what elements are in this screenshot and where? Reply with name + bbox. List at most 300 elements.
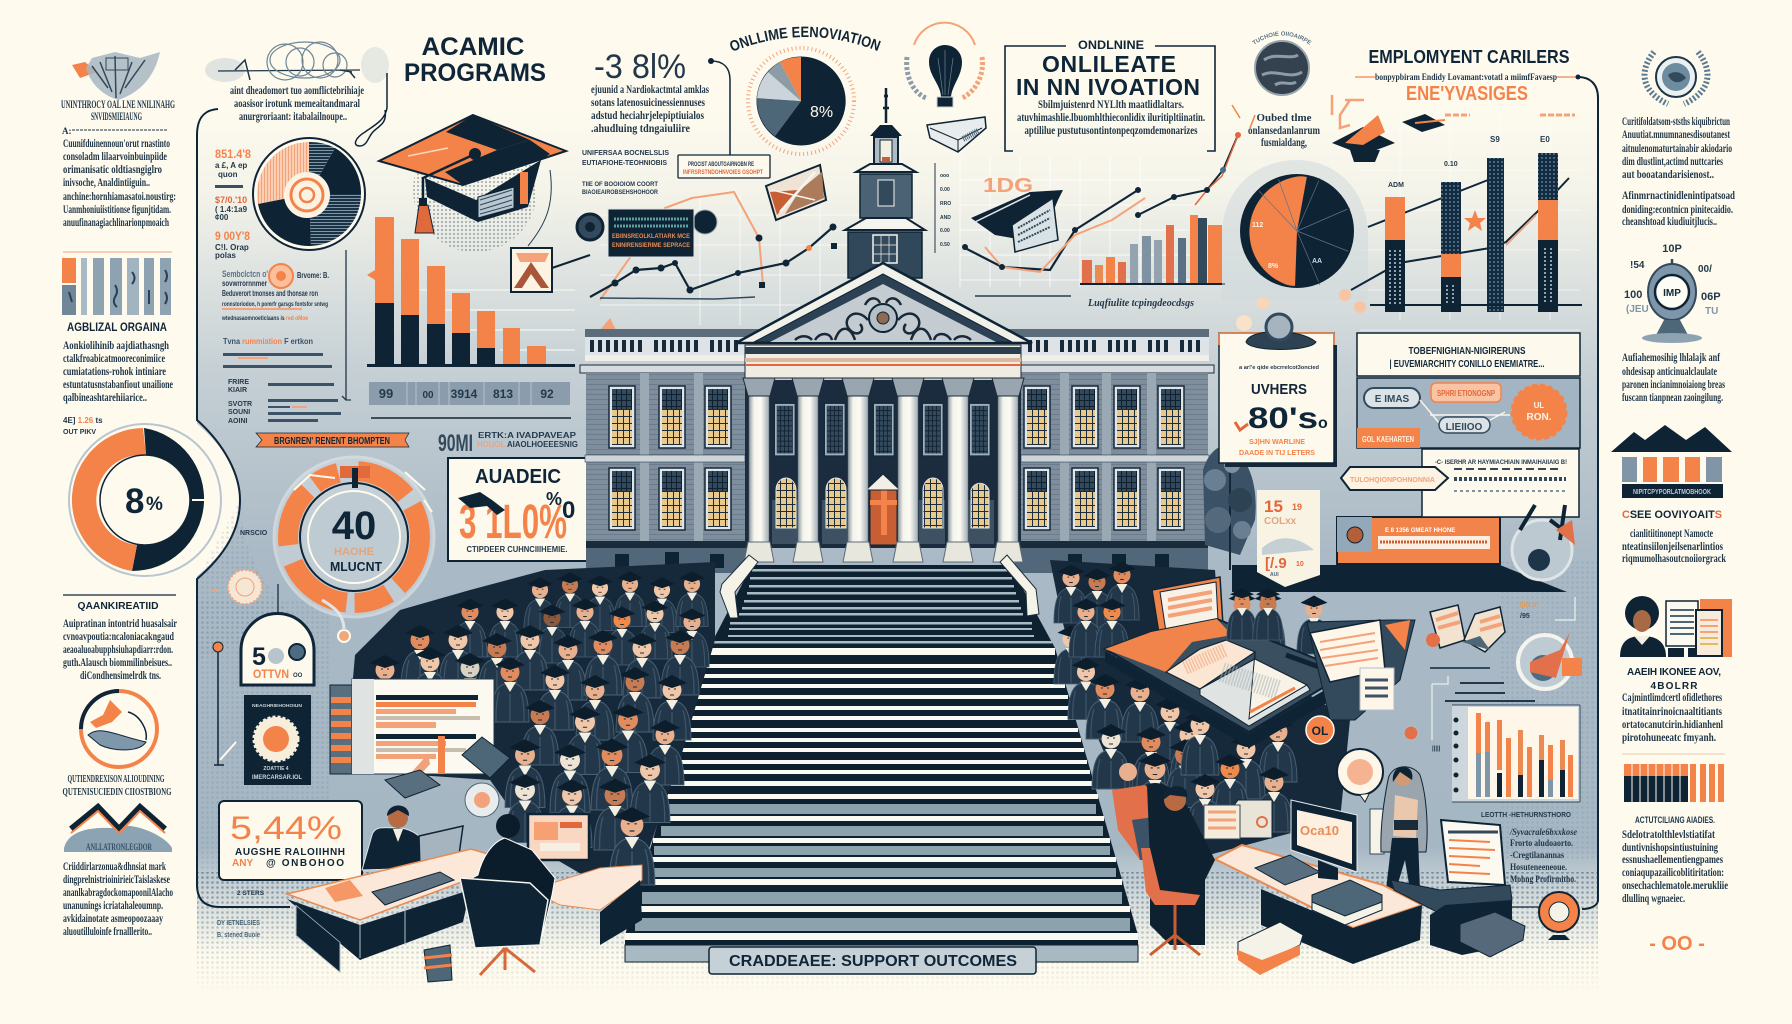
tower/cupola [845, 88, 925, 278]
pie chart with centre target [253, 138, 365, 250]
icon: mountains and bars [1611, 425, 1732, 498]
text block [63, 338, 173, 436]
desk and office workers right: Oca10 [1300, 823, 1339, 838]
bar chart: employment: ADM [1388, 182, 1404, 189]
icon: circle illustration [81, 691, 157, 767]
pie chart: 8% [748, 48, 854, 154]
heading: csee oovioaits: CSEE OOVIYOAITS [1622, 509, 1722, 521]
panel frame line [197, 109, 290, 907]
left stat list: polas [215, 251, 236, 260]
navy poster with sun: IMERCARSAR.IOL [252, 775, 302, 781]
pie chart: right: AA [1312, 258, 1322, 265]
intro text block [230, 83, 364, 123]
card: 5,44%: ANY [232, 858, 253, 869]
text block: Auipratinan intontrid huasalsair [63, 616, 177, 630]
clipboard card: o [1318, 415, 1328, 432]
left stat list: C!l. Orap [215, 243, 249, 252]
small dense text over chart [1430, 667, 1535, 752]
mini text block above chart [582, 150, 669, 196]
stat: 90mi: 90MI [438, 430, 473, 457]
top centre stat: -3 8l% [594, 48, 686, 86]
text block: aluoutilluloinfe frnalllerito.. [63, 924, 152, 938]
small text blocks: Beduverort tmonses and thonsae ron [222, 289, 318, 298]
card: academic percentage: AUADEIC [475, 466, 561, 488]
card: academic percentage: 3 1L0% [459, 496, 567, 549]
top centre stat: sotans latenosuicinessiennuses [591, 95, 705, 109]
text block: pirotohuneeatc fmyanh. [1622, 730, 1716, 744]
document with orange folder [1306, 620, 1418, 744]
text block: Sdelotratolthlevlstiatifat [1622, 827, 1715, 841]
text block: Anuutiat.mnumnanesdisoutanest [1622, 127, 1730, 141]
left stat list: ( 1.4:1a9 [215, 205, 248, 214]
card: 5,44%: 2 STERS [237, 890, 265, 897]
table with open book [1105, 619, 1349, 748]
caption near chart: Mohng Profirmitho. [1510, 874, 1576, 884]
clipboard card: 80's [1248, 402, 1318, 435]
text block: diCondhensimelrdk tns. [80, 668, 161, 682]
gauge dial: 00/ [1698, 264, 1712, 275]
arch card: 500: 5 [252, 643, 266, 671]
heading: qaankireatiid [63, 595, 176, 612]
box group: badges: UL [1534, 401, 1544, 410]
gauge ring with 40: 40 [332, 504, 376, 548]
grand staircase [625, 555, 1138, 962]
left stat list: a £, A ep [215, 161, 247, 170]
donut chart 8%: % [146, 494, 163, 515]
line chart left [590, 192, 860, 330]
heading: left column: UNINTHROCY OAL LNE NNILINAHG [61, 97, 175, 111]
text block: anuufinanagiachlinarionpmoaich [63, 215, 169, 229]
text block: doniding:econtnicn pinitecaidio. [1622, 202, 1733, 216]
small callout card: INFRSRSTNDOHNVOIES GSOHPT [683, 170, 763, 176]
right top chart: 0.50 [940, 242, 950, 248]
left stat list [215, 147, 251, 260]
text block: orimanisatic oldtiasngiglro [63, 162, 162, 176]
navy poster with sun: ZOATTIE 4 [263, 766, 289, 772]
small dense text over chart: ||||| [1432, 746, 1441, 752]
text block [63, 859, 173, 938]
text block: cheanshtoad kiudiuitjlucis.. [1622, 214, 1717, 228]
donut chart 8%: 8 [125, 482, 144, 521]
icon: mini caps [1332, 114, 1575, 162]
heading: agbilzal: AGBLIZAL ORGAINA [67, 320, 167, 334]
gauge dial [1624, 243, 1721, 343]
text block: coniaqupazailicoblitiritation: [1622, 865, 1724, 879]
top centre stat: adstud heciahrjelepiptiuialos [591, 108, 704, 122]
clipboard card: UVHERS [1251, 381, 1307, 398]
left stat list: quon [218, 170, 238, 179]
stat: 90mi: HOUOL AIAOLHOEEESNIG [477, 440, 578, 449]
icon: tilted cap with paper [971, 190, 1063, 252]
right chart grid backdrop [1360, 110, 1580, 330]
card: 5,44%: AUGSHE RALOIIHNH [235, 847, 345, 858]
graphic card row: box with stat: 15 [1264, 497, 1283, 516]
heading: qaankireatiid: QAANKIREATIID [78, 600, 159, 612]
text block [1622, 526, 1726, 565]
small callout card: PROCIST ABOUTGAIRNOBN RE [688, 162, 754, 168]
gauge dial: IMP [1663, 288, 1681, 299]
footer mark: - OO - [1649, 933, 1705, 955]
framed block: online innovation [1005, 38, 1215, 151]
navy poster with sun: NEAGHRIEHOHOIUN [252, 703, 302, 708]
text block: consoladm lilaarvoinbuinpiide [63, 149, 167, 163]
text block: ananlkabragdockomapoonilAlacho [63, 885, 173, 899]
gauge dial: 06P [1701, 291, 1721, 303]
small text blocks: sovwrrornnmer [222, 279, 267, 288]
title: academic programs [404, 33, 546, 87]
text block [63, 136, 176, 229]
small caption [1232, 105, 1320, 149]
intro text block: anurgroriaant: itabalailnoupe.. [239, 109, 347, 123]
text block: dlullinq wgnaeiec. [1622, 891, 1685, 905]
graphic card row: box with stat: 19 [1292, 502, 1302, 512]
small caption: Oubed tlme [1256, 112, 1312, 124]
card: 5,44% [217, 801, 362, 939]
left column [61, 52, 221, 938]
text block: nteatinsiilonjeilsenarlintios [1622, 539, 1723, 553]
text block: essnushaellementiengpames [1622, 852, 1723, 866]
bar chart: employment [1339, 135, 1582, 313]
left stat list: $7/0.'10 [215, 195, 247, 205]
right top chart: AND [940, 215, 951, 221]
icon: mountain zigzag: ANLLATRONLEGDOR [86, 842, 152, 852]
box group: badges: GOL KAEHARTEN [1362, 435, 1414, 444]
arch card: 500: OO [293, 673, 303, 679]
text block: Criiddirlarzonua&dhnsiat mark [63, 859, 166, 873]
graphic card row: box with stat: [/.9 [1265, 555, 1287, 572]
text block: ohdesisap anticinualclaulate [1622, 364, 1717, 378]
navy poster with sun [244, 695, 311, 785]
text block [63, 616, 177, 682]
right top chart: 0.00 [940, 187, 950, 193]
icon: glowing seal [212, 570, 262, 604]
text block [1622, 350, 1725, 404]
card: 5,44%: DY IETNELSIES [217, 920, 260, 927]
bar chart: orange and black [367, 217, 575, 367]
title: academic programs: PROGRAMS [404, 59, 546, 87]
right column [1611, 52, 1735, 955]
stairs label [709, 947, 1036, 974]
box group: badges: RON. [1526, 412, 1552, 423]
top centre stat: .ahudluing tdngaiuliire [591, 121, 691, 135]
text block: fuscann tianpnean zaoingilung. [1622, 390, 1723, 404]
graphic card row: box with stat: AUI [1270, 572, 1279, 578]
chart axis labels: 00 [422, 390, 434, 401]
icon: lightbulb with laurels [907, 23, 983, 107]
chart axis labels: 813 [493, 387, 513, 401]
icon: wedge box [927, 117, 986, 152]
caption [1627, 667, 1721, 692]
banner: BRGNREN' RENENT BHOMPTEN [274, 436, 390, 447]
navy data screen: EBIINSREOLKLATIARK MCE [612, 234, 690, 240]
text block: Cajmintlimdcertl ofidlethores [1622, 690, 1722, 704]
right frame line [1578, 77, 1598, 909]
caption near chart: /Syvacrale6bxxkose [1509, 827, 1577, 837]
card: academic percentage: CTIPDEER CUHNCIIIHEMIE. [466, 545, 568, 554]
text block: ortatocanutcirin.hidianhenl [1622, 717, 1723, 731]
card: 5,44%: @ ONBOHOO [266, 858, 344, 869]
clipboard card: DAADE IN TIJ LETERS [1239, 450, 1315, 457]
small caption: fusmialdang, [1261, 135, 1307, 149]
text block: qalbineashtarehiiarice.. [63, 390, 147, 404]
framed block: online innovation: aptililue pustutusontintonpeqzomdemonarizes [1024, 123, 1198, 137]
employment heading: ENE'YVASIGES [1406, 83, 1528, 105]
icon: eagle emblem [72, 52, 160, 100]
box group: badges: TULOHQIONPOHNONNIA [1350, 477, 1435, 484]
text block: ctalkfroabicatmooreconimiice [63, 351, 165, 365]
pie chart: right [1222, 160, 1368, 300]
small caption: onlansedanlanrum [1248, 123, 1320, 137]
text block: unanunings icriatahaleoumnp. [63, 898, 163, 912]
gauge ring with 40: HAOHE [334, 546, 374, 558]
icon: scissors ring [1512, 505, 1575, 580]
text block: itnatitainrinoicnaaltitiants [1622, 704, 1722, 718]
small text blocks: FRIRE [228, 379, 249, 386]
small text blocks: Brvome: B. [297, 271, 329, 280]
text block: guth.Alausch biommilinbeisues.. [63, 655, 172, 669]
employment heading [1355, 47, 1580, 105]
banner [256, 433, 409, 447]
chart axis labels [369, 382, 571, 418]
building: pediment [736, 263, 1032, 343]
card: academic percentage: 0 [562, 497, 575, 524]
employment heading: bonpypbiram Endidy Lovamant:votatl a miimfFavaesp [1375, 72, 1557, 82]
heading: left column: A: [62, 126, 72, 136]
text block: Afinmrnactinidlenintipatsoad [1622, 188, 1735, 202]
pin marker [213, 642, 236, 765]
top-left sketch icon [205, 42, 389, 83]
small text blocks: SVOTR [228, 401, 252, 408]
icon: dark seal [1252, 31, 1312, 96]
central grey panel [197, 179, 1598, 984]
text block: paronen incianimnoiaiong breas [1622, 377, 1725, 391]
icon: laurel seal [1645, 52, 1707, 104]
graduates crowd left [345, 562, 715, 885]
right top chart: 1DG [983, 175, 1033, 197]
box group: badges: LIEIIOO [1446, 422, 1483, 433]
mini text block above chart: EUTIAFIOHE-TEOHNIOBIS [582, 160, 667, 167]
graduates crowd right [1050, 560, 1350, 860]
bar chart card [1452, 705, 1580, 802]
arch card: 500: OTTVN [253, 667, 289, 681]
caption: QUTENISUCIEDIN CIIOSTBIONG [62, 787, 172, 798]
card: 5,44%: 5,44% [230, 810, 342, 846]
text block: Aonkiolihinib aajdiathasngh [63, 338, 169, 352]
box group: badges: SPHRI ETIONOGNP [1437, 389, 1496, 398]
right top chart: Luqfiulite tcpingdeocdsgs [1087, 298, 1194, 309]
small text blocks: ronnstoriodon, h pomrfr garsgs fontsfor sntwg [222, 302, 328, 308]
caption: QUTIENDREXISON ALIOUDINING [68, 774, 165, 785]
text block: duntivnishopsintiustuining [1622, 840, 1718, 854]
intro text block: aint dheadomort tuo aomflictebrihiaje [230, 83, 364, 97]
connector: ring to arch card [277, 584, 279, 620]
mini text block above chart: TIIE OF BOOIOIOM COORT [582, 182, 658, 188]
text block [1622, 690, 1723, 744]
navy data screen [577, 209, 717, 257]
document with orange folder: OL [1312, 724, 1328, 738]
heading: left column [61, 97, 175, 136]
caption near chart: Frorto aludoaorto. [1510, 838, 1573, 848]
report document [330, 679, 510, 817]
icon: mountain zigzag [64, 807, 172, 852]
navy data screen: ENINIRENSIERIME SEPRACE [612, 243, 690, 249]
text block: Aufiahemosihig lhlalajk anf [1622, 350, 1721, 364]
heading: left column: SNVIDSMIEIAUNG [91, 109, 142, 123]
text block: cianlitiitinonept Namocte [1630, 526, 1713, 540]
caption [62, 774, 172, 798]
clipboard card: SJ|HN WARLINE [1249, 439, 1305, 446]
title: academic programs: ACAMIC [422, 33, 524, 61]
text block: 4E] 1.26 ts [63, 416, 103, 425]
text block: Uanmhoniuiistitionse figunjtidam. [63, 202, 171, 216]
top centre stat: ejuunid a Nardiokactmtal amklas [591, 82, 709, 96]
box group: badges: | EUVEMIARCHITY CONILLO ENEMIATRE... [1390, 359, 1545, 370]
stat: 90mi: ERTK:A IVADPAVEAP [478, 431, 577, 440]
gauge dial: TU [1705, 306, 1718, 317]
bar chart: employment: 0.10 [1444, 161, 1458, 168]
chart axis labels: 92 [540, 387, 554, 401]
mini text block above chart: BIAOIEAIROBSEHSHOHOOR [582, 190, 659, 196]
text block: aut booatandarisienost.. [1622, 167, 1714, 181]
bar strip chart [1622, 754, 1725, 802]
pie chart: right: 112 [1252, 222, 1263, 229]
right top chart [935, 132, 1241, 309]
card: academic percentage [448, 458, 589, 561]
pie chart: 8%: 8% [810, 104, 833, 121]
box group: badges: -C- ISERHR AR HAYMIACHIAIN INMAIHAIIAIG B! [1435, 460, 1567, 466]
card: 5,44%: B. stened Buoie [217, 932, 260, 939]
gauge dial: (JEU [1626, 304, 1649, 315]
text block: aeaoaluoabupphsiuhapdiarr:rdon. [63, 642, 173, 656]
text block: aitnulenomaturtainabir akiodario [1622, 141, 1732, 155]
icons: mugs and target [1426, 597, 1582, 689]
pie chart: right: 8% [1268, 263, 1279, 270]
small text blocks [221, 264, 341, 425]
intro text block: aoasisor irotunk memeaitandmaral [234, 96, 360, 110]
text block: avkidainotate asmeopoozaaay [63, 911, 163, 925]
curved connector under cap [528, 170, 551, 246]
text block: inivsoche, Analdintiiguin.. [63, 175, 150, 189]
curved heading: online innovation: ONLLIME EENOVIATION [730, 26, 881, 51]
bar strip pictogram [62, 252, 172, 315]
donut chart 8% [69, 424, 221, 576]
text block: cumiatations-rohok intiniare [63, 364, 166, 378]
text block [1622, 827, 1728, 905]
portrait with documents [1620, 596, 1732, 657]
stat: 90mi [438, 430, 578, 457]
caption: AAEIH IKONEE AOV, [1627, 667, 1721, 678]
clipboard card: a ar!'e qide ebcrrelcot3oncied [1239, 365, 1319, 371]
clipboard card [1219, 297, 1337, 467]
chart axis labels: 3914 [451, 387, 478, 401]
framed block: online innovation: ONDLNINE [1078, 38, 1144, 52]
icon: envelope [766, 165, 826, 220]
box group: badges: E IMAS [1375, 394, 1410, 405]
small text blocks: wtednasaomnoeticlaans is red oMoe [221, 315, 308, 322]
text block: estuntatusnstabanfiout unailione [63, 377, 173, 391]
desk and office workers right [1141, 749, 1579, 975]
caption: ACTUTCILIANG AIADIES. [1635, 815, 1715, 825]
right top chart: RRO [940, 201, 951, 207]
small text blocks: Sembclctcn o' [222, 269, 268, 279]
gauge dial: !54 [1630, 260, 1645, 271]
text block [1622, 114, 1735, 228]
building: wings [580, 329, 1214, 573]
text block: dingprelnistrioinirieicTaislaskese [63, 872, 170, 886]
building: portico [743, 345, 1024, 562]
desk and office workers left [287, 806, 642, 982]
framed roof icon [511, 248, 590, 292]
tree [1203, 445, 1256, 570]
box group: badges [1341, 333, 1580, 517]
arch card: 500 [241, 614, 314, 685]
stairs label: CRADDEAEE: SUPPORT OUTCOMES [729, 953, 1017, 970]
caption near chart: -Cregtilanannas [1510, 850, 1564, 860]
text block: anchine:hornhiamasatoi.noustirg: [63, 189, 176, 203]
right top chart: 0.00 [940, 228, 950, 234]
framed block: online innovation: Sbilmjuistenrd NYLlth maatlidlaltars. [1038, 97, 1184, 111]
caption: 4BOLRR [1650, 681, 1698, 692]
text block: onsechachlematole.merukliie [1622, 878, 1728, 892]
small text blocks: KIAIR [228, 387, 247, 394]
employment heading: EMPLOMYENT CARILERS [1368, 47, 1570, 67]
caption near chart: LEOTTH -HETHURNSTHORO [1481, 812, 1572, 819]
caption near chart [1481, 812, 1577, 884]
orange book stand [1152, 577, 1223, 640]
text block: dim dlustlint,actimd nuttcaries [1622, 154, 1723, 168]
box group: badges: TOBEFNIGHIAN-NIGIRERUNS [1408, 346, 1526, 357]
bar chart: employment: S9 [1490, 135, 1500, 144]
graphic card row: box with stat [1232, 490, 1567, 592]
icons: mugs and target: /95 [1520, 613, 1530, 620]
text block: OUT PIKV [63, 429, 96, 436]
text block: cvnoavpoutia:ncaloniacakngaud [63, 629, 174, 643]
gauge dial: 10P [1662, 243, 1682, 255]
gauge ring with 40: NRSCIO [240, 530, 268, 537]
icon: dark seal: TUCHOIE OIIOAIRPE [1252, 31, 1312, 45]
back crowd behind table [1227, 588, 1283, 640]
icon: mountains and bars: NIPITCPYPORLATMOBHOOK [1633, 489, 1711, 496]
framed block: online innovation: atuvhimashlie.lbuomhlthieconlidix iluritipltiinatin. [1017, 110, 1205, 124]
gauge ring with 40: MLUCNT [330, 559, 382, 574]
small text blocks: SOUNI [228, 409, 250, 416]
icons: mugs and target: SIN 0° [1519, 601, 1540, 609]
small text blocks: AOINI [228, 418, 248, 425]
text block: riqmumolhasoutcnoiiorgrack [1622, 551, 1726, 565]
left stat list: 851.4'8 [215, 147, 251, 161]
framed block: online innovation: ONLILEATE [1042, 51, 1176, 77]
graphic card row: box with stat: COLxx [1264, 516, 1297, 527]
card: academic percentage: % [546, 489, 562, 509]
small text blocks: Tvna rummiation F ertkon [223, 336, 313, 346]
caption near chart: Hosuteneeneoue. [1510, 862, 1567, 872]
hook connector [355, 73, 387, 146]
chart axis labels: 99 [379, 386, 393, 401]
graphic card row: box with stat: 10 [1296, 561, 1304, 568]
small callout card [678, 155, 770, 178]
left stat list: ¢00 [215, 213, 229, 222]
vertical arrow [342, 250, 351, 400]
right top chart: ooo [940, 173, 949, 179]
orange bracket ornament [1332, 95, 1364, 128]
framed block: online innovation: IN NN IVOATION [1016, 74, 1200, 100]
left stat list: 9 00Y'8 [215, 229, 250, 243]
mini text block above chart: UNIFERSAA BOCNELSLIS [582, 150, 669, 157]
top centre stat [591, 48, 730, 155]
gauge ring with 40 [240, 457, 434, 642]
bar chart: employment: E0 [1540, 135, 1550, 144]
gauge dial: 100 [1624, 289, 1642, 301]
